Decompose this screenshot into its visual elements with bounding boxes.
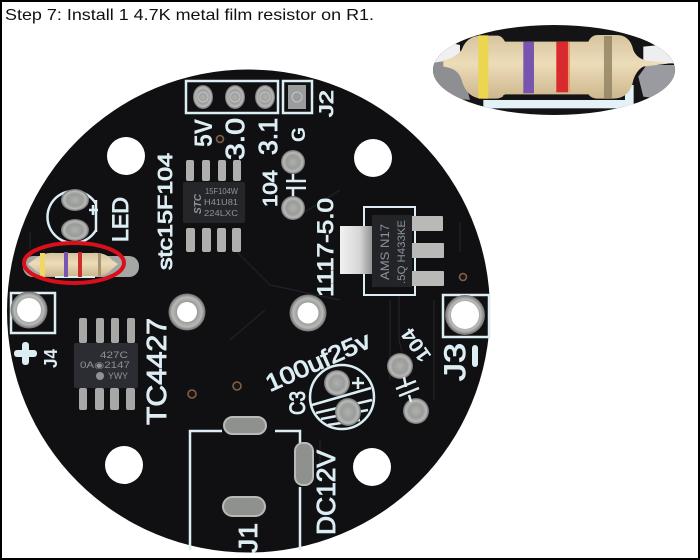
resistor R1 on board	[23, 252, 139, 278]
silkscreen labels: 5V	[190, 119, 218, 147]
mounting holes	[105, 137, 392, 486]
silkscreen labels: 3.1	[253, 118, 283, 155]
silkscreen labels: 100uf25v	[261, 327, 375, 397]
chip: TC4427	[74, 318, 138, 410]
connector J3	[443, 295, 489, 337]
chip: stc15F104W: 15F104W	[205, 186, 238, 196]
circuit board	[7, 70, 490, 553]
red highlight ellipse	[24, 243, 124, 283]
silkscreen labels: LED	[108, 197, 133, 242]
chip: stc15F104W: 224LXC	[204, 208, 238, 218]
silkscreen labels: J2	[317, 90, 338, 117]
silkscreen labels: 104	[260, 170, 282, 207]
silkscreen labels: DC12V	[311, 449, 341, 535]
plus and minus marks	[14, 342, 478, 367]
silkscreen labels: J3	[439, 343, 472, 381]
inset: resistor close-up	[433, 25, 675, 115]
silkscreen labels: 3.0	[220, 118, 250, 160]
capacitor 104 lower	[387, 353, 429, 424]
silkscreen labels: C3	[285, 391, 310, 415]
silkscreen labels: stc15F104	[155, 153, 177, 270]
vias	[188, 136, 466, 398]
connector J4	[10, 292, 55, 333]
regulator 1117-5.0	[340, 207, 444, 295]
capacitor 104 upper	[281, 150, 306, 220]
chip: TC4427: 0A◉2147	[80, 360, 130, 370]
silkscreen labels: G	[289, 127, 310, 142]
silkscreen labels: J1	[233, 523, 263, 553]
chip: stc15F104W: H41U81	[204, 197, 238, 207]
silkscreen labels	[41, 90, 472, 553]
center mounting pads	[168, 294, 326, 332]
regulator 1117-5.0: AMS N17	[378, 224, 392, 280]
connector J2	[186, 81, 312, 113]
connector J1	[190, 417, 313, 550]
chip: TC4427: 427C	[100, 350, 129, 360]
silkscreen labels: J4	[41, 349, 61, 368]
silkscreen labels: 104	[397, 323, 436, 366]
silkscreen labels: TC4427	[141, 318, 172, 425]
title: Step 7: Install 1 4.7K metal film resistor on R1.	[5, 7, 374, 24]
chip: stc15F104W	[183, 160, 245, 252]
chip: stc15F104W: STC	[193, 193, 204, 214]
silkscreen labels: 1117-5.0	[313, 198, 338, 297]
regulator 1117-5.0: .5Q H433KE	[396, 220, 408, 284]
chip: TC4427: YWY	[108, 371, 128, 381]
LED footprint	[47, 189, 98, 243]
capacitor C3	[310, 365, 374, 429]
